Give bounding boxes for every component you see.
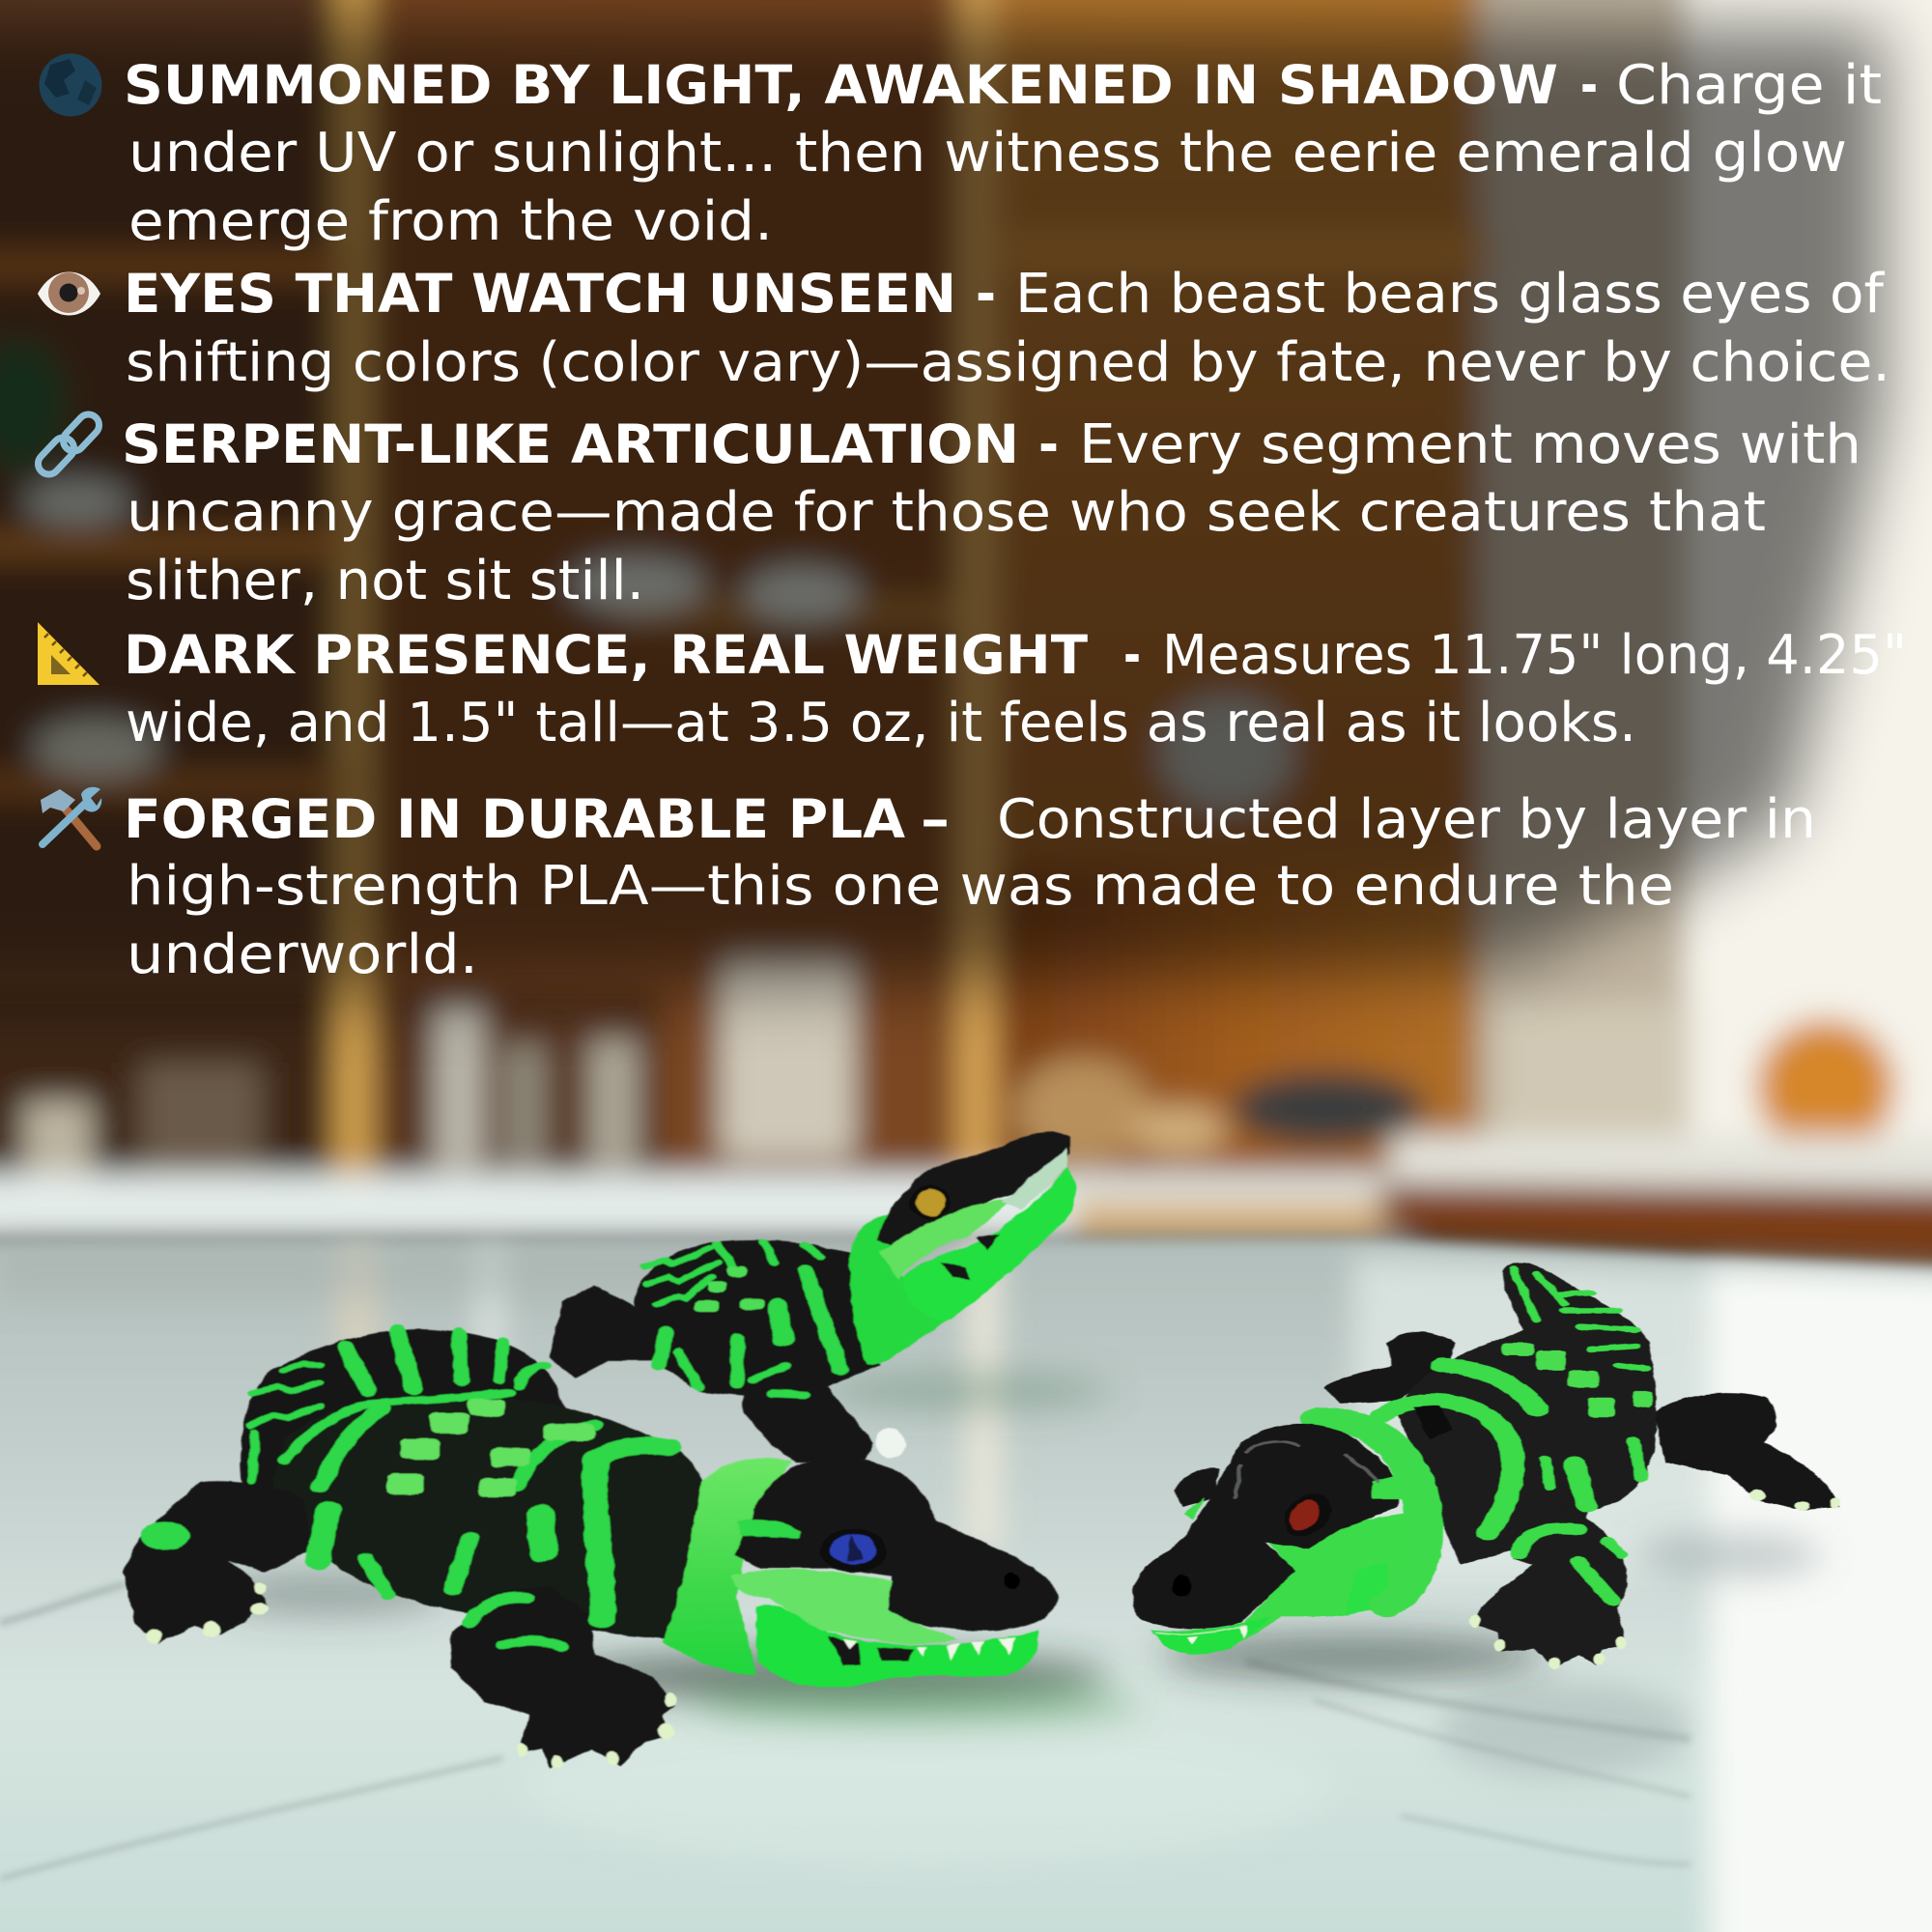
icon: triangle ruler xyxy=(38,622,99,685)
feature 1: summoned by light: SUMMONED BY LIGHT, AWAKENED IN SHADOW xyxy=(124,54,1558,116)
feature 2: eyes that watch unseen: Each beast bears glass eyes of xyxy=(1015,263,1885,326)
lower jaw xyxy=(756,1605,1038,1687)
background: blurred kitchen cabinets xyxy=(0,0,1932,1267)
feature 4: dark presence, real weight xyxy=(38,622,1907,754)
fore leg xyxy=(1471,1507,1627,1668)
feature 1: summoned by light: under UV or sunlight... then witness the eerie emerald glow xyxy=(128,122,1847,185)
feature 4: dark presence, real weight: - xyxy=(1123,624,1141,686)
icon: eye xyxy=(38,272,100,315)
feature 5: forged in durable PLA: Constructed layer by layer in xyxy=(997,788,1816,851)
dark overlay behind text xyxy=(0,19,1884,995)
feature 2: eyes that watch unseen: shifting colors (color vary)—assigned by fate, never by choice. xyxy=(126,331,1890,394)
collar xyxy=(1320,1419,1424,1605)
feature 3: serpent-like articulation: Every segment moves with xyxy=(1079,413,1861,476)
feature 1: summoned by light xyxy=(39,54,1882,253)
feature 5: forged in durable PLA: FORGED IN DURABLE PLA xyxy=(124,788,905,850)
feature 5: forged in durable PLA xyxy=(41,787,1816,986)
feature 1: summoned by light: emerge from the void. xyxy=(128,190,773,253)
feature 5: forged in durable PLA: underworld. xyxy=(127,923,478,986)
feature 3: serpent-like articulation: SERPENT-LIKE ARTICULATION xyxy=(122,413,1019,475)
feature 5: forged in durable PLA: – xyxy=(921,788,950,850)
alligator: back, yellow eye xyxy=(550,1132,1076,1463)
feature 3: serpent-like articulation: slither, not sit still. xyxy=(126,550,644,612)
head xyxy=(734,1456,1060,1631)
feature 4: dark presence, real weight: DARK PRESENCE, REAL WEIGHT xyxy=(124,624,1088,686)
stripes xyxy=(250,1331,669,1646)
feature 1: summoned by light: - xyxy=(1580,54,1598,116)
feature 3: serpent-like articulation: - xyxy=(1038,413,1059,475)
feature 2: eyes that watch unseen: EYES THAT WATCH UNSEEN xyxy=(124,263,956,325)
icon: chain link xyxy=(34,410,103,479)
icon: hammer and wrench xyxy=(41,787,101,846)
feature 3: serpent-like articulation xyxy=(34,410,1861,612)
feature 2: eyes that watch unseen: - xyxy=(976,263,996,325)
tail xyxy=(241,1328,566,1491)
feature 2: eyes that watch unseen xyxy=(38,263,1890,394)
feature 4: dark presence, real weight: wide, and 1.5" tall—at 3.5 oz, it feels as real as it looks. xyxy=(126,692,1636,754)
hind leg xyxy=(123,1481,310,1643)
alligator: right, red eye xyxy=(1132,1263,1840,1669)
fore leg xyxy=(449,1585,675,1769)
feature 5: forged in durable PLA: high-strength PLA—this one was made to endure the xyxy=(127,855,1674,918)
icon: dark moon xyxy=(39,54,102,116)
background: marble counter xyxy=(0,1238,1932,1932)
alligator: front left, blue eye xyxy=(123,1328,1060,1769)
feature 4: dark presence, real weight: Measures 11.75" long, 4.25" xyxy=(1162,624,1907,687)
shadows under alligators xyxy=(213,1372,1821,1722)
feature 3: serpent-like articulation: uncanny grace—made for those who seek creatures that xyxy=(127,481,1766,544)
collar xyxy=(663,1458,792,1676)
head xyxy=(1132,1424,1399,1629)
throat and jaw xyxy=(1151,1514,1439,1655)
feature 1: summoned by light: Charge it xyxy=(1616,54,1882,117)
